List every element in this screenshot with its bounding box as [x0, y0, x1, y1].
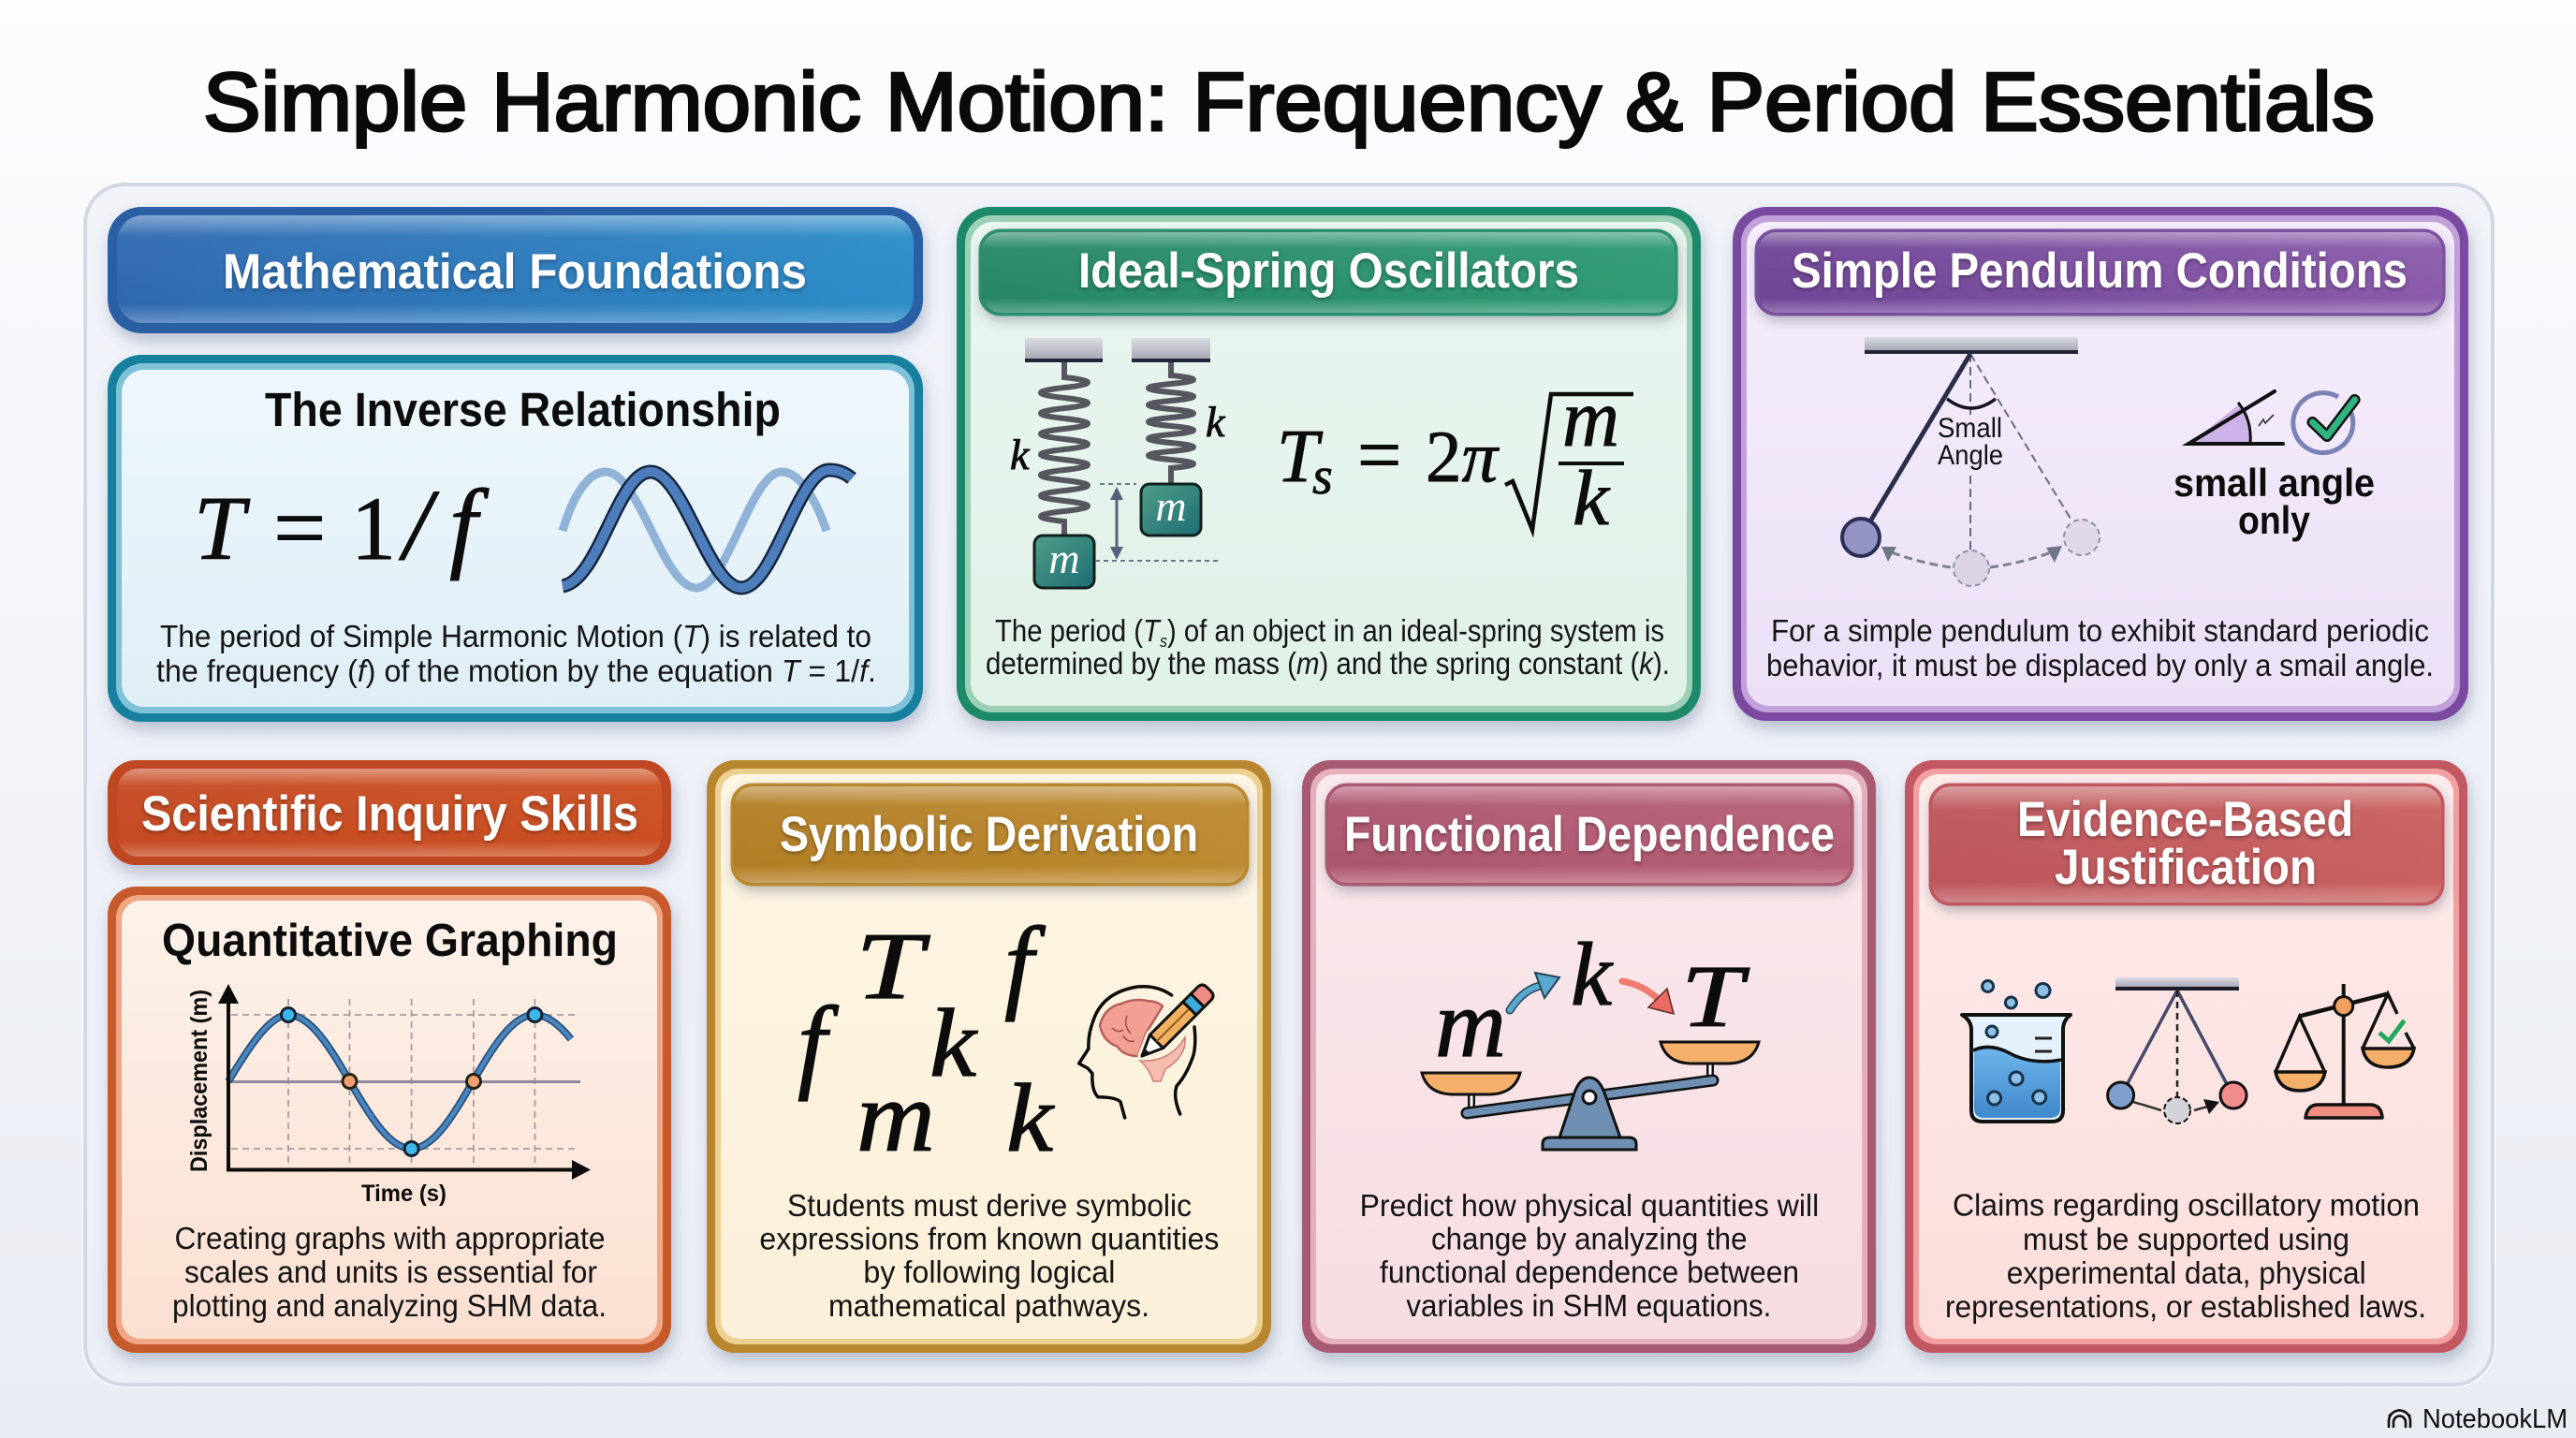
- symbols: T f f k m k: f: [1004, 906, 1046, 1022]
- text: graphing description: scales and units is essential for: [184, 1255, 597, 1289]
- text: pendulum description: For a simple pendulum to exhibit standard periodic: [1771, 613, 2429, 648]
- title: Simple Harmonic Motion: Frequency & Period Essentials: [203, 55, 2375, 148]
- text: dependence description: change by analyzing the: [1431, 1221, 1747, 1256]
- panel: Quantitative Graphing: [108, 887, 671, 1353]
- diagram: two springs with masses: k: [1010, 431, 1031, 478]
- panel: Functional Dependence: [1302, 760, 1876, 1353]
- text: justification description: representations, or established laws.: [1945, 1289, 2426, 1324]
- heading: Mathematical Foundations: Mathematical Foundations: [223, 244, 807, 300]
- diagram: balance with m, k, T: [1422, 924, 1759, 1150]
- diagram: two springs with masses: k: [1206, 398, 1226, 446]
- header: Symbolic Derivation: [732, 785, 1248, 885]
- formula: T_s = 2 pi sqrt(m/k): 2π: [1426, 416, 1500, 497]
- panel: Symbolic Derivation: [707, 760, 1271, 1353]
- panel: Scientific Inquiry Skills header: [108, 760, 671, 865]
- text: justification description: Claims regarding oscillatory motion: [1953, 1188, 2420, 1223]
- text: dependence description: [1360, 1188, 1819, 1323]
- header: Ideal-Spring Oscillators: [980, 230, 1676, 315]
- icon: small angle with check mark: [2188, 391, 2355, 453]
- text: graphing description: [172, 1221, 607, 1323]
- panel: Simple Pendulum Conditions: [1733, 207, 2468, 721]
- diagram: two springs with masses: m: [1155, 482, 1187, 530]
- formula: T_s = 2 pi sqrt(m/k): [1277, 374, 1633, 542]
- text: derivation description: mathematical pathways.: [828, 1288, 1149, 1323]
- diagram: balance with m, k, T: m: [1435, 970, 1506, 1078]
- text: spring description line 2: determined by the mass (m) and the spring constant (k).: [986, 646, 1670, 681]
- symbols: T f f k m k: f: [798, 986, 840, 1102]
- formula: T = 1/f: /: [399, 470, 440, 581]
- formula: T = 1/f: =: [273, 476, 326, 580]
- text: derivation description: by following logical: [863, 1255, 1115, 1289]
- formula: T = 1/f: f: [449, 470, 490, 581]
- text: derivation description: expressions from known quantities: [759, 1221, 1219, 1256]
- diagram: pendulum with small angle: Small: [1938, 413, 2002, 444]
- formula: T_s = 2 pi sqrt(m/k): m: [1562, 374, 1619, 464]
- text: dependence description: Predict how physical quantities will: [1360, 1188, 1819, 1223]
- icon: head with brain and pencil: [1079, 983, 1215, 1118]
- icon: balance scale with check: [2276, 984, 2414, 1118]
- text: inverse relationship description: The period of Simple Harmonic Motion (T) is related to: [160, 619, 871, 653]
- icon: beaker with bubbles: [1962, 981, 2071, 1122]
- label: small angle only: small angle: [2174, 461, 2375, 505]
- chart: displacement vs time: Time (s): [361, 1181, 446, 1207]
- panel: Mathematical Foundations header: [108, 207, 923, 333]
- header: Functional Dependence: [1326, 785, 1852, 885]
- header: Symbolic Derivation: Symbolic Derivation: [780, 807, 1198, 862]
- icon: two sine waves: [563, 470, 852, 588]
- text: dependence description: functional dependence between: [1380, 1255, 1799, 1289]
- diagram: two springs with masses: [1010, 338, 1226, 588]
- text: inverse relationship description line 2: the frequency (f) of the motion by the equation T = 1/f.: [156, 653, 876, 688]
- heading: Scientific Inquiry Skills: Scientific Inquiry Skills: [141, 786, 638, 842]
- panel: Ideal-Spring Oscillators: [957, 207, 1701, 721]
- diagram: two springs with masses: m: [1048, 535, 1080, 582]
- text: pendulum description line 2: behavior, it must be displaced by only a smail angle.: [1766, 648, 2434, 682]
- heading: Quantitative Graphing: Quantitative Graphing: [162, 916, 618, 966]
- text: justification description: [1945, 1188, 2426, 1324]
- diagram: pendulum with small angle: Angle: [1938, 440, 2003, 471]
- text: justification description: must be supported using: [2023, 1222, 2349, 1256]
- header: Functional Dependence: Functional Dependence: [1344, 807, 1835, 862]
- text: graphing description: plotting and analyzing SHM data.: [172, 1288, 607, 1323]
- symbols: T f f k m k: k: [929, 990, 978, 1097]
- panel: The Inverse Relationship: [108, 355, 923, 722]
- panel: Evidence-Based Justification: [1905, 760, 2467, 1353]
- symbols: T f f k m k: k: [1006, 1064, 1055, 1172]
- formula: T_s = 2 pi sqrt(m/k): T: [1277, 416, 1324, 498]
- symbols: T f f k m k: [798, 906, 1055, 1173]
- header: Ideal-Spring Oscillators: Ideal-Spring Oscillators: [1078, 243, 1579, 299]
- text: justification description: experimental data, physical: [2007, 1255, 2366, 1290]
- diagram: balance with m, k, T: k: [1571, 924, 1614, 1024]
- heading: The Inverse Relationship: The Inverse Relationship: [265, 383, 781, 436]
- label: small angle only: only: [2238, 498, 2311, 542]
- icon: pendulum: [2108, 977, 2247, 1123]
- header: Evidence-Based Justification: Evidence-Based: [2017, 792, 2353, 847]
- text: spring description: s: [1160, 632, 1167, 651]
- formula: T_s = 2 pi sqrt(m/k): s: [1312, 448, 1333, 506]
- header: Evidence-Based Justification: [1930, 785, 2443, 904]
- symbols: T f f k m k: T: [856, 914, 930, 1020]
- formula: T_s = 2 pi sqrt(m/k): =: [1357, 412, 1401, 499]
- symbols: T f f k m k: m: [856, 1062, 935, 1173]
- formula: T = 1/f: T: [194, 478, 251, 580]
- chart: displacement vs time: Displacement (m): [186, 990, 212, 1172]
- main container panel: [82, 182, 2496, 1387]
- header: Simple Pendulum Conditions: Simple Pendulum Conditions: [1792, 243, 2408, 299]
- text: dependence description: variables in SHM equations.: [1406, 1288, 1771, 1323]
- header: Evidence-Based Justification: Justification: [2055, 840, 2317, 895]
- text: derivation description: [759, 1188, 1219, 1323]
- diagram: balance with m, k, T: T: [1681, 948, 1749, 1046]
- text: spring description: ) of an object in an ideal-spring system is: [1167, 613, 1664, 648]
- text: derivation description: Students must derive symbolic: [787, 1188, 1192, 1223]
- header: Simple Pendulum Conditions: [1756, 230, 2444, 315]
- text: graphing description: Creating graphs with appropriate: [174, 1221, 605, 1255]
- formula: T = 1/f: 1: [351, 478, 396, 579]
- text: spring description: The period (T: [995, 613, 1162, 648]
- logo: NotebookLM: NotebookLM: [2422, 1404, 2568, 1434]
- diagram: pendulum with small angle: [1842, 337, 2100, 586]
- label: small angle only: [2174, 461, 2375, 542]
- chart: displacement vs time: [186, 984, 591, 1207]
- formula: T_s = 2 pi sqrt(m/k): k: [1573, 455, 1611, 542]
